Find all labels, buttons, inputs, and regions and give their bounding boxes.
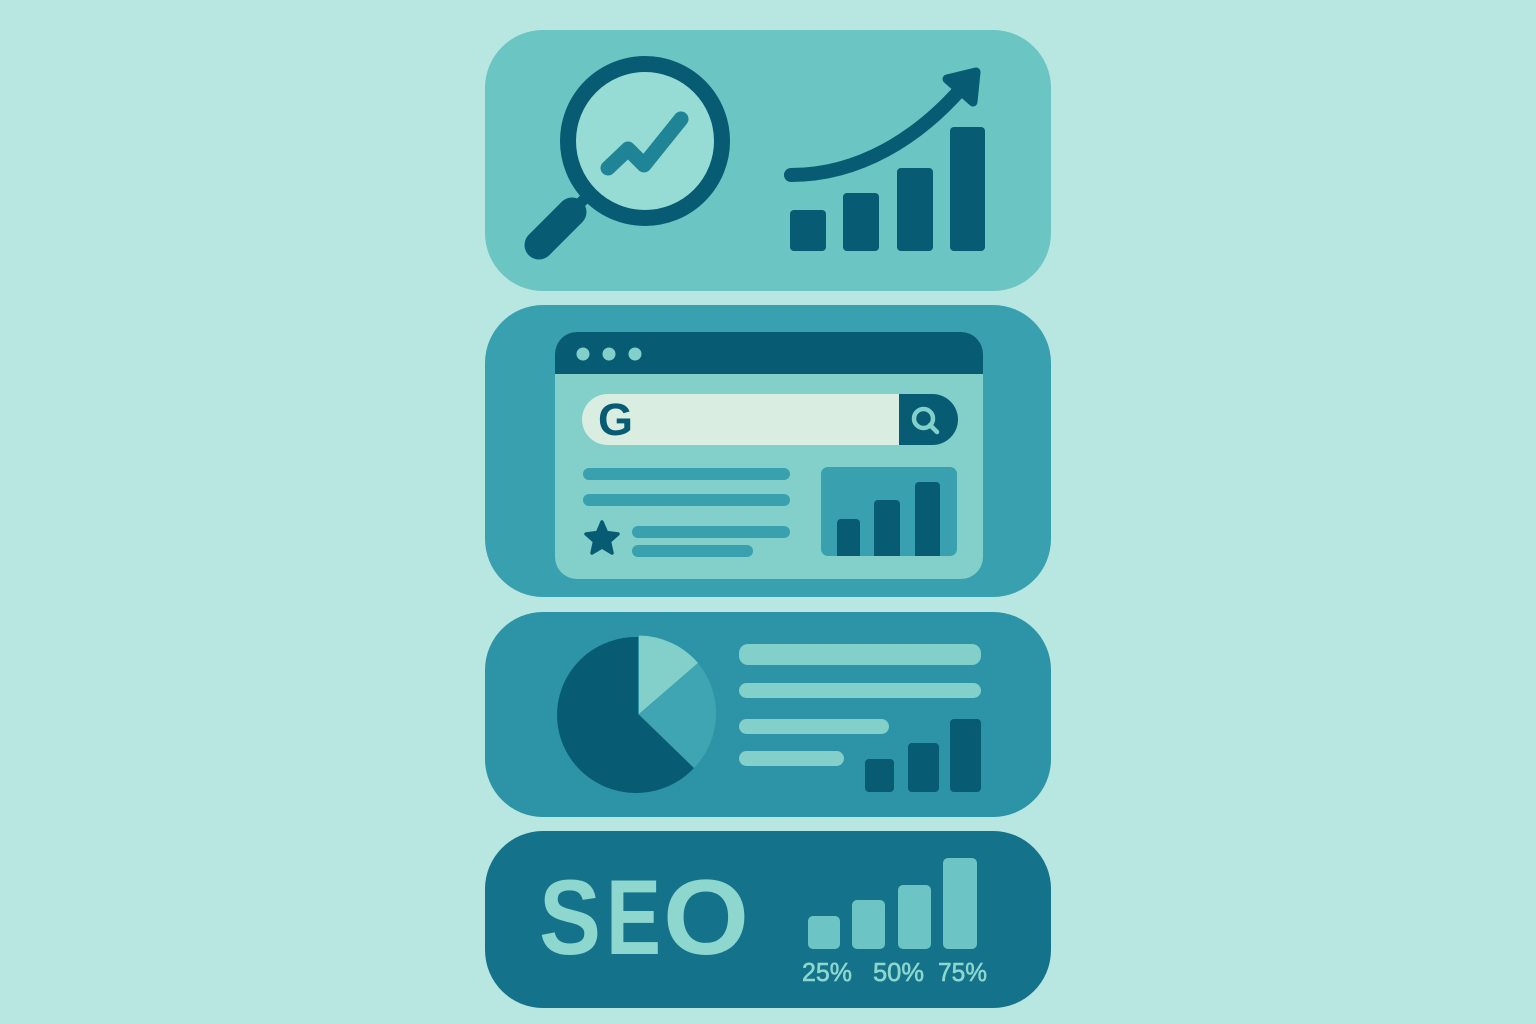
percentage labels: 75%: [938, 957, 987, 987]
percentage labels: 50%: [873, 957, 924, 987]
icon: growth arrow: [791, 72, 976, 175]
window dots: [576, 348, 642, 360]
percentage labels: 25%: [802, 957, 852, 987]
browser title bar: [555, 332, 983, 374]
icon: star: [586, 522, 618, 553]
report text lines: [739, 644, 981, 766]
SEO heading: O: [663, 857, 749, 977]
SEO heading: [539, 857, 749, 977]
panel: SEO metrics: [485, 831, 1051, 1008]
percentage labels: [802, 957, 987, 987]
G logo letter: G: [598, 394, 633, 445]
bar chart: growth bars: [790, 127, 985, 251]
search bar: [582, 394, 958, 445]
bar chart: analytics bars: [865, 719, 981, 792]
panel: search results browser: [485, 305, 1051, 597]
SEO heading: E: [606, 857, 661, 977]
panel: analytics report: [485, 612, 1051, 817]
SEO heading: S: [539, 857, 601, 977]
browser window: [555, 332, 983, 579]
pie chart: [557, 636, 716, 793]
result text lines: [583, 468, 790, 557]
icon: magnifying glass with trend line: [539, 64, 722, 245]
mini bar chart: [821, 467, 957, 556]
panel: search analysis and growth: [485, 30, 1051, 291]
bar chart: SEO bars: [808, 858, 977, 949]
icon: search magnifier: [914, 409, 937, 432]
